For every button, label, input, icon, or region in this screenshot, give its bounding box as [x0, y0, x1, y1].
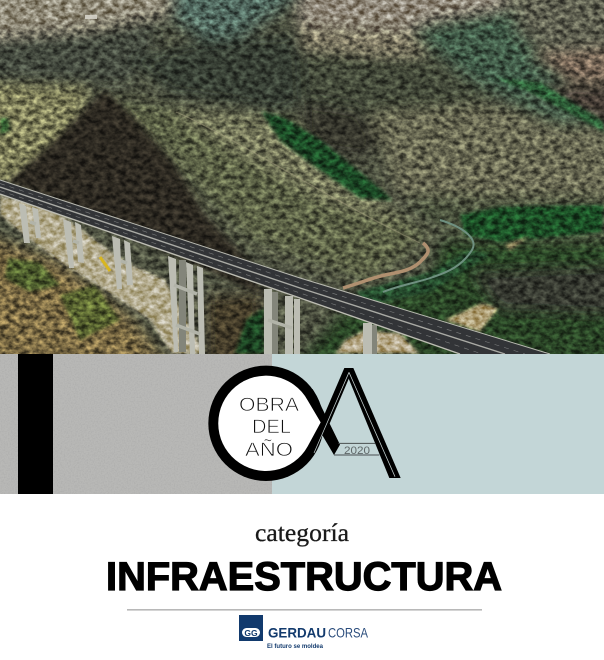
sponsor logo: Gerdau Corsa: [239, 615, 369, 650]
right leg of the A: [344, 368, 401, 478]
dirt road and river: [85, 15, 474, 292]
viaduct piers: [19, 203, 377, 354]
green forest patches: [0, 78, 604, 354]
viaduct deck: [0, 180, 550, 354]
logo text: OBRA: OBRA: [239, 394, 299, 416]
crane: [100, 257, 110, 271]
icon: GG square: GG: [244, 628, 258, 638]
tagline: El futuro se moldea: [267, 643, 323, 650]
panel: concrete texture background: [0, 354, 272, 494]
wordmark: GERDAU: GERDAU: [268, 624, 326, 640]
terrain base colours: [0, 0, 604, 380]
logo text: DEL: DEL: [252, 416, 291, 438]
pale construction ground under the viaduct: [0, 196, 530, 354]
heading: INFRAESTRUCTURA: INFRAESTRUCTURA: [106, 555, 502, 599]
burnt hillside: [8, 90, 262, 295]
tail of the O: [303, 389, 340, 455]
year: 2020: [344, 445, 370, 457]
divider line: [127, 609, 482, 611]
black vertical bar: [18, 354, 53, 494]
mottled vegetation texture: [0, 0, 604, 354]
subheading: categoría: categoría: [255, 518, 349, 547]
logo text: AÑO: AÑO: [245, 437, 293, 461]
wordmark: CORSA: CORSA: [328, 624, 369, 640]
white inner teardrop: [218, 376, 321, 471]
stripes inside the A: [314, 372, 395, 477]
ring of the O: [208, 366, 324, 481]
logo: Obra del Año 2020: [208, 366, 401, 481]
left leg of the A: [317, 368, 353, 432]
2020 plaque lines: [334, 443, 379, 455]
aerial photo: viaduct crossing mountain valley: [0, 0, 604, 380]
panel: pale teal background: [272, 354, 604, 494]
